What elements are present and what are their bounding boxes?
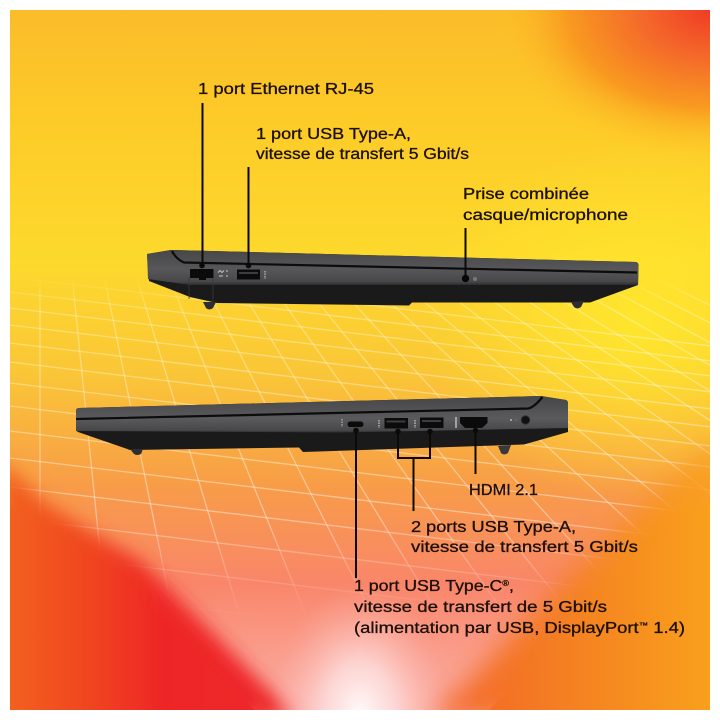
- label: USB-C: [354, 578, 685, 637]
- label: USB-C: 1 port USB Type-C: [354, 578, 484, 595]
- label: USB-C: 1.4): [648, 620, 685, 637]
- audio jack and indicator: [510, 416, 530, 424]
- USB-C port: [342, 419, 364, 427]
- USB-A port 2: [415, 418, 444, 428]
- upper grey surface: [76, 396, 568, 432]
- ethernet icon: [218, 270, 228, 276]
- perspective grid: [10, 278, 710, 610]
- orange glow bottom right: [420, 440, 720, 720]
- label: Ethernet: 1 port Ethernet RJ-45: [198, 81, 374, 98]
- callout line: HDMI: [473, 428, 478, 474]
- label: USB-A top: 1 port USB Type-A,: [256, 126, 411, 143]
- port door: [189, 277, 213, 302]
- upper grey surface: [147, 250, 639, 285]
- light beam: [276, 598, 441, 710]
- label: USB-C: (alimentation par USB, DisplayPort: [354, 620, 594, 637]
- callout bracket: 2 USB-A: [395, 429, 433, 511]
- label: 2 USB-A: [411, 519, 638, 556]
- laptop body silhouette: [147, 250, 639, 306]
- label: USB-C: ®: [502, 579, 509, 588]
- ethernet port: [190, 269, 214, 280]
- label: headset: casque/microphone: [463, 207, 628, 224]
- foot right: [498, 445, 511, 454]
- laptop: top view, left side ports: [147, 250, 639, 310]
- label: USB-C: ™: [639, 621, 648, 630]
- callout line: Ethernet: [199, 103, 205, 268]
- red glow bottom left: [0, 460, 300, 720]
- label: USB-A top: [256, 126, 469, 163]
- label: 2 USB-A: vitesse de transfert 5 Gbit/s: [411, 539, 638, 556]
- USB-A port: [237, 270, 260, 280]
- foot left: [203, 302, 216, 310]
- label: USB-A top: vitesse de transfert 5 Gbit/s: [256, 146, 469, 163]
- hinge line: [172, 251, 637, 272]
- USB-A port 1: [379, 418, 408, 428]
- label: 2 USB-A: 2 ports USB Type-A,: [411, 519, 576, 536]
- headphone jack: [462, 275, 477, 282]
- foot right: [571, 301, 584, 308]
- HDMI port: [456, 417, 488, 428]
- callout line: USB-C: [353, 428, 359, 578]
- label: headset: [463, 186, 628, 224]
- laptop body silhouette: [76, 396, 568, 452]
- label: headset: Prise combinée: [463, 186, 589, 203]
- label: USB-C: ,: [509, 578, 514, 595]
- USB icon: [264, 271, 266, 279]
- label: USB-C: vitesse de transfert de 5 Gbit/s: [354, 599, 607, 616]
- callout line: headset: [464, 228, 466, 276]
- hinge line: [76, 397, 542, 419]
- label: HDMI: HDMI 2.1: [469, 482, 538, 499]
- callout line: USB-A top: [246, 167, 251, 268]
- laptop: bottom view, right side ports: [76, 396, 568, 455]
- foot left: [130, 449, 143, 455]
